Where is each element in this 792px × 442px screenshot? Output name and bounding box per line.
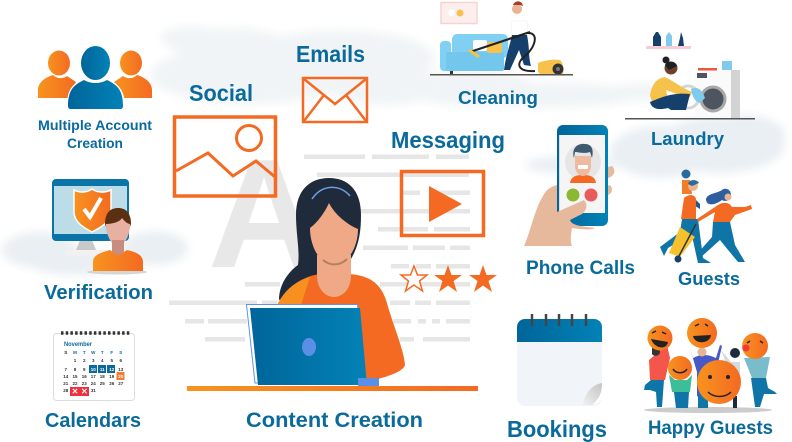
heading: Multiple Account Creation: Creation <box>67 136 123 151</box>
icon: calendar: 7 <box>64 367 67 372</box>
purple man <box>689 345 722 398</box>
icon: calendar: 9 <box>83 367 86 372</box>
icon: calendar: 17 <box>91 374 96 379</box>
illustration: happy guests <box>644 318 777 413</box>
heading: Bookings: Bookings <box>507 416 607 442</box>
grey text lines <box>169 154 470 342</box>
icon: calendar: T <box>83 350 86 355</box>
heading: Messaging: Messaging <box>391 127 505 153</box>
green person <box>669 375 692 392</box>
icon: calendar: W <box>91 350 96 355</box>
icon: envelope <box>303 78 367 122</box>
vacuum <box>538 60 563 74</box>
icon: calendar: T <box>101 350 104 355</box>
icon: calendar: 19 <box>109 374 115 379</box>
grey letter A: A <box>208 127 320 300</box>
icon: calendar: 13 <box>118 367 124 372</box>
icon: star rating <box>401 265 497 292</box>
grey woman <box>730 348 740 358</box>
man <box>688 181 698 191</box>
icon: video play frame <box>402 172 484 236</box>
illustration: cleaning <box>430 1 573 76</box>
heading: Calendars: Calendars <box>45 410 141 432</box>
icon: calendar: 27 <box>118 381 124 386</box>
illustration: guests with luggage <box>660 170 752 263</box>
icon: calendar: F <box>110 350 113 355</box>
icon: calendar: 14 <box>63 374 69 379</box>
icon: calendar: 4 <box>101 358 104 363</box>
icon: verification monitor <box>52 179 147 274</box>
icon: calendar: 1 <box>74 358 77 363</box>
left person <box>649 345 670 380</box>
icon: calendar: 16 <box>82 374 87 379</box>
icon: calendar: 6 <box>119 358 122 363</box>
illustration: laundry <box>625 32 755 120</box>
icon: calendar: ✕ <box>81 387 88 396</box>
floor <box>430 74 573 76</box>
headband <box>312 187 350 199</box>
heading: Verification: Verification <box>44 282 153 304</box>
icon: calendar: 8 <box>74 367 77 372</box>
desk line <box>187 386 478 391</box>
neck <box>317 255 351 297</box>
icon: calendar <box>54 333 134 400</box>
icon: calendar: 3 <box>92 358 95 363</box>
woman <box>512 4 522 14</box>
hair <box>279 178 361 300</box>
icon: calendar: S <box>119 350 122 355</box>
icon: calendar: 11 <box>100 367 105 372</box>
icon: calendar: S <box>64 350 67 355</box>
icon: calendar: ✕ <box>72 387 78 396</box>
wall picture <box>441 2 477 24</box>
face <box>310 203 358 265</box>
icon: calendar: 22 <box>72 381 78 386</box>
heading: Emails: Emails <box>296 41 365 67</box>
icon: calendar: 2 <box>83 358 86 363</box>
heading: Social: Social <box>189 80 253 106</box>
shirt <box>275 274 405 381</box>
heading: Cleaning: Cleaning <box>458 88 538 108</box>
icon: calendar: 25 <box>100 381 105 386</box>
icon: calendar: 15 <box>72 374 78 379</box>
heading: Happy Guests: Happy Guests <box>648 418 773 439</box>
emoji faces <box>648 318 768 404</box>
icon: calendar: 18 <box>100 374 105 379</box>
teal person <box>744 357 770 378</box>
icon: bookings notepad <box>517 314 602 406</box>
heading: Multiple Account Creation <box>38 118 153 151</box>
child <box>682 170 690 178</box>
heading: Multiple Account Creation: Multiple Account <box>38 118 153 133</box>
icon: calendar: M <box>73 350 77 355</box>
icon: calendar: 12 <box>109 367 115 372</box>
vacuum pole and hose <box>470 32 530 52</box>
illustration: woman with laptop <box>246 178 405 386</box>
icon: multiple accounts <box>38 46 152 112</box>
suitcase <box>669 227 695 257</box>
icon: calendar: 23 <box>82 381 87 386</box>
icon: calendar: 28 <box>63 388 69 393</box>
icon: calendar: 26 <box>109 381 115 386</box>
icon: calendar: 24 <box>91 381 96 386</box>
icon: calendar: 21 <box>63 381 69 386</box>
heading: Laundry: Laundry <box>651 129 724 149</box>
icon: calendar: 20 <box>118 374 124 379</box>
icon: calendar: 5 <box>110 358 113 363</box>
icon: calendar: 10 <box>91 367 96 372</box>
illustration: hand holding phone <box>524 125 614 246</box>
sofa <box>452 34 508 58</box>
icon: calendar: 31 <box>91 388 96 393</box>
icon: image frame <box>174 117 276 196</box>
laptop <box>246 304 365 383</box>
heading: Phone Calls: Phone Calls <box>526 258 635 279</box>
icon: calendar: November <box>64 342 93 348</box>
woman <box>706 189 731 204</box>
heading: Guests: Guests <box>678 269 740 289</box>
clouds background <box>2 26 785 275</box>
heading: Content Creation: Content Creation <box>246 409 423 432</box>
